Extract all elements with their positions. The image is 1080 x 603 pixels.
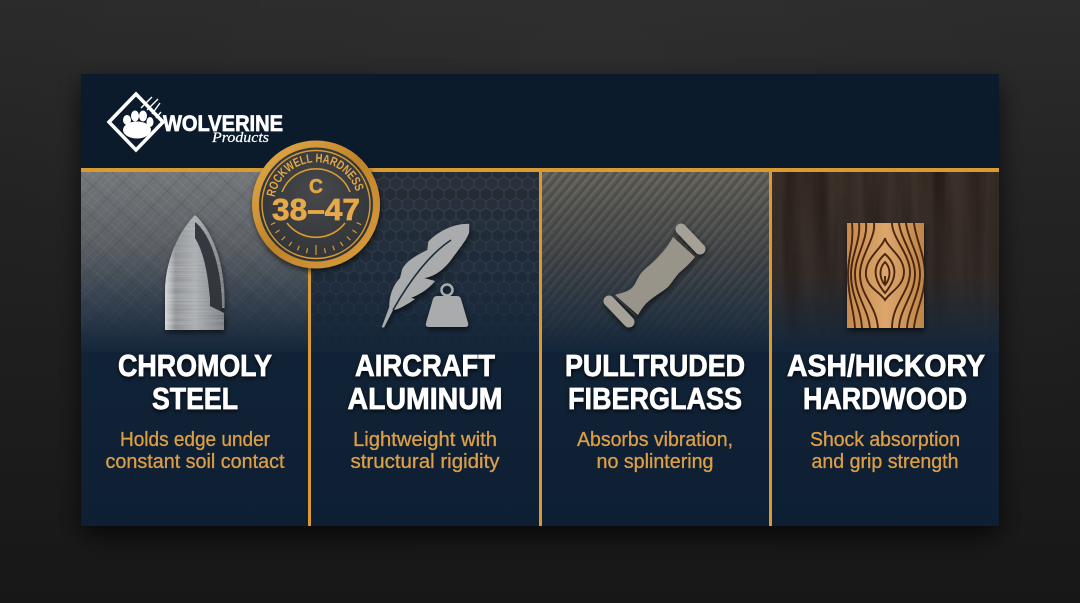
icon: feather and weight — [382, 224, 469, 328]
header band — [81, 74, 999, 169]
heading: pulltruded fiberglass — [565, 348, 745, 416]
description: chromoly steel: constant soil contact — [106, 451, 285, 473]
heading: pulltruded fiberglass: FIBERGLASS — [568, 381, 742, 416]
heading: aircraft aluminum: ALUMINUM — [348, 381, 502, 416]
heading: aircraft aluminum: AIRCRAFT — [355, 348, 495, 383]
description: chromoly steel — [106, 429, 285, 473]
wordmark: WOLVERINE — [163, 111, 283, 136]
heading: chromoly steel: STEEL — [152, 381, 238, 416]
heading: ash hickory hardwood: ASH/HICKORY — [787, 348, 985, 383]
main card — [81, 74, 999, 526]
heading: pulltruded fiberglass: PULLTRUDED — [565, 348, 745, 383]
badge letter: C — [309, 176, 323, 198]
badge: Rockwell hardness — [250, 140, 384, 276]
description: aircraft aluminum: Lightweight with — [353, 429, 497, 451]
icon: blade — [165, 215, 225, 330]
icon: wood plank — [847, 223, 925, 328]
badge label: ROCKWELL HARDNESS — [266, 154, 364, 197]
description: chromoly steel: Holds edge under — [120, 429, 270, 451]
panel: chromoly steel — [81, 172, 309, 526]
heading: ash hickory hardwood: HARDWOOD — [803, 381, 967, 416]
icon: fiberglass rod — [609, 229, 700, 322]
tagline: Products — [211, 130, 269, 146]
panel: pulltruded fiberglass — [542, 172, 770, 526]
logo: Wolverine Products — [109, 94, 283, 150]
icon: diamond with paw — [109, 94, 163, 150]
badge value: 38–47 — [272, 192, 360, 227]
description: pulltruded fiberglass: no splintering — [596, 451, 714, 473]
heading: ash hickory hardwood — [787, 348, 985, 416]
description: pulltruded fiberglass — [577, 429, 733, 473]
heading: chromoly steel: CHROMOLY — [118, 348, 272, 383]
panel: ash hickory hardwood — [772, 172, 999, 526]
heading: chromoly steel — [118, 348, 272, 416]
description: ash hickory hardwood — [810, 429, 960, 473]
description: aircraft aluminum — [350, 429, 500, 473]
description: ash hickory hardwood: Shock absorption — [810, 429, 960, 451]
description: aircraft aluminum: structural rigidity — [350, 451, 500, 473]
description: pulltruded fiberglass: Absorbs vibration, — [577, 429, 733, 451]
heading: aircraft aluminum — [348, 348, 502, 416]
badge ticks — [271, 223, 361, 255]
description: ash hickory hardwood: and grip strength — [812, 451, 958, 473]
panel: aircraft aluminum — [311, 172, 540, 526]
